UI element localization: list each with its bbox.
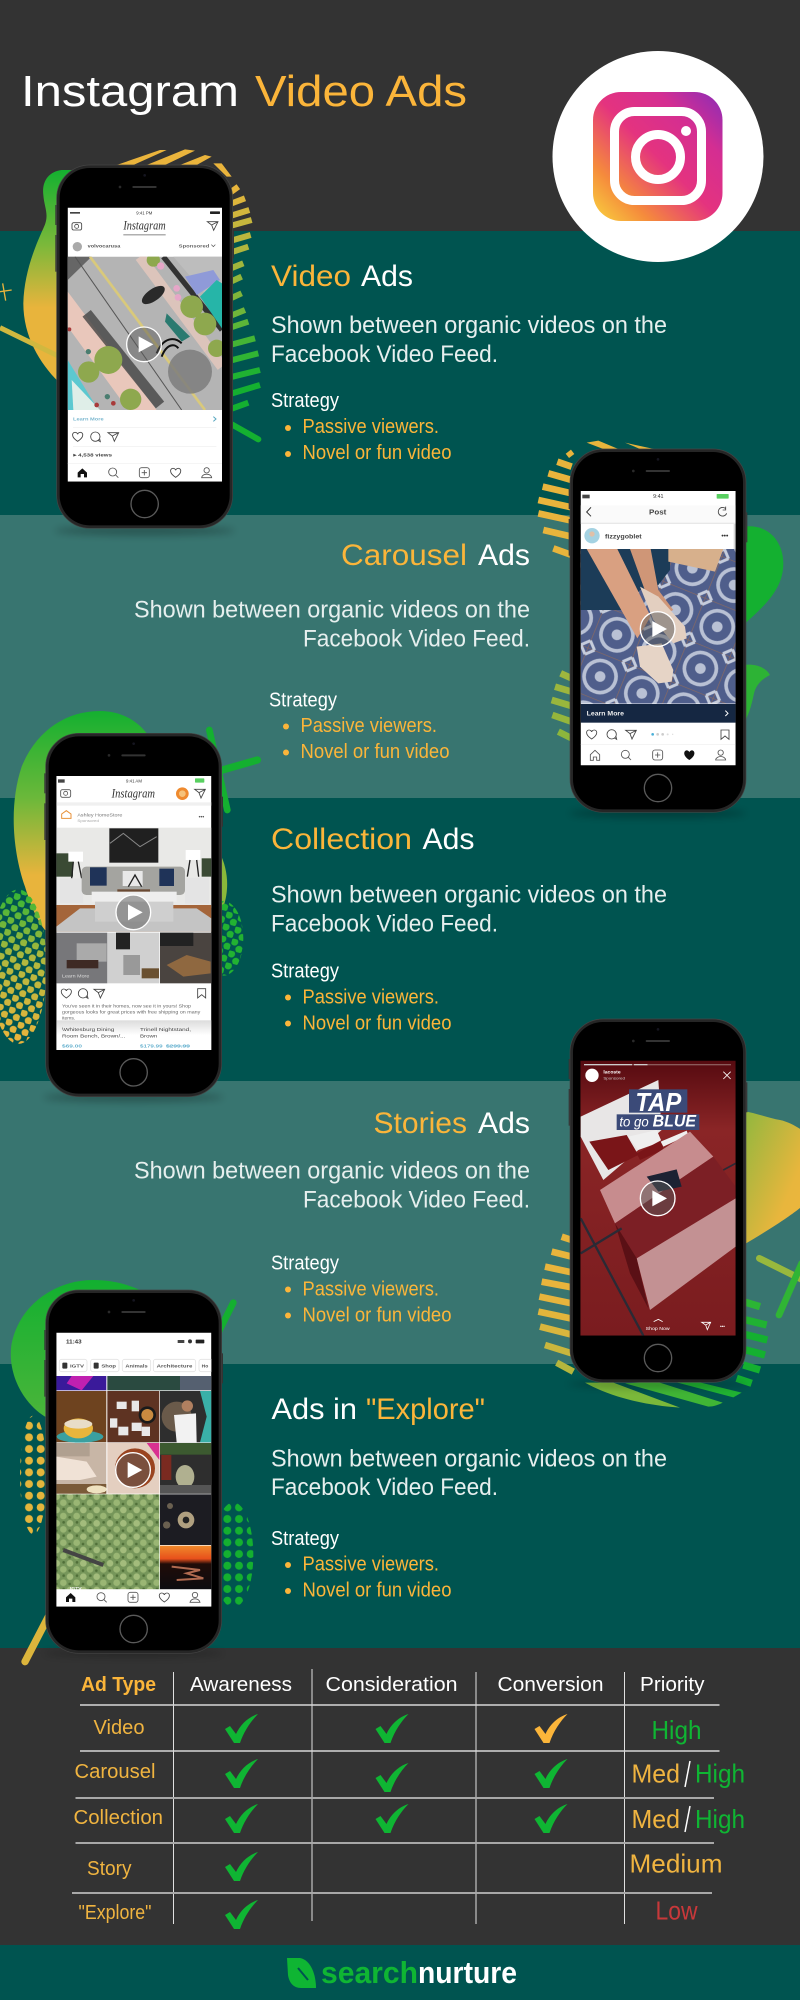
phone screen: collection post: Instagram xyxy=(111,786,155,800)
phone: explore ad with decoration xyxy=(11,1280,253,1662)
phone screen: instagram feed video: Instagram xyxy=(123,218,166,232)
table header row xyxy=(81,1674,704,1696)
panel: stories ads text: Ads xyxy=(478,1107,530,1140)
priority column: Med xyxy=(632,1758,680,1788)
panel: video ads text: Shown between organic videos on the xyxy=(271,312,667,339)
phone: carousel ad with decoration xyxy=(538,441,783,818)
phone screen: explore grid: 11:43 xyxy=(66,1339,82,1345)
footer logo: searchnurture: search xyxy=(321,1955,418,1990)
footer logo: searchnurture xyxy=(287,1955,517,1990)
title: Instagram xyxy=(21,67,239,116)
phone screen: collection post: ••• xyxy=(199,815,204,821)
title xyxy=(21,67,467,116)
phone screen: collection post: 9:41 AM xyxy=(126,778,142,783)
phone screen: collection post: Learn More xyxy=(62,973,90,978)
title: Video Ads xyxy=(255,67,467,116)
panel: stories ads text: Novel or fun video xyxy=(302,1304,452,1326)
phone screen: carousel post: Post xyxy=(649,507,667,516)
phone screen: collection post: You've seen it in their homes, now see it in yours! Shop xyxy=(62,1003,192,1008)
ad type row labels: Carousel xyxy=(74,1761,156,1783)
panel: carousel ads text: Carousel xyxy=(341,539,467,572)
panel: explore ads text: Strategy xyxy=(271,1528,339,1550)
phone screen: story ad: to go xyxy=(619,1114,649,1130)
panel: explore ads text: "Explore" xyxy=(366,1393,485,1426)
phone screen: instagram feed video: ▸ 4,538 views xyxy=(72,453,112,459)
priority column: High xyxy=(695,1804,745,1834)
panel: stories ads text: Facebook Video Feed. xyxy=(303,1186,530,1214)
phone screen: collection post: $299.99 xyxy=(166,1043,190,1049)
phone screen: carousel post: fizzygoblet xyxy=(605,533,643,540)
panel: explore ads text: Shown between organic videos on the xyxy=(271,1446,667,1472)
phone screen: collection post: \Whitesburg Dining xyxy=(62,1027,115,1033)
priority column: Medium xyxy=(630,1848,722,1878)
icon: instagram logo xyxy=(552,51,764,262)
comparison table xyxy=(72,1669,745,1929)
phone screen: carousel post: 9:41 xyxy=(653,494,664,500)
phone screen: explore grid: IGTV xyxy=(70,1586,82,1592)
phone screen: story ad: Shop Now xyxy=(646,1326,670,1331)
panel: stories ads text xyxy=(134,1107,530,1326)
table header row: Consideration xyxy=(326,1674,458,1696)
phone screen: collection post: $69.00 xyxy=(62,1043,82,1049)
table header row: Ad Type xyxy=(81,1674,156,1696)
panel: video ads text xyxy=(271,260,667,464)
panel: explore ads text: Passive viewers. xyxy=(302,1554,439,1576)
panel: explore ads text xyxy=(271,1393,667,1602)
phone screen: instagram feed video: Sponsored xyxy=(179,243,209,249)
panel: explore ads text: Ads in xyxy=(272,1393,357,1426)
phone screen: collection post: Room Bench, Brown/... xyxy=(62,1034,125,1040)
ad type row labels: Collection xyxy=(74,1807,163,1829)
phone screen: collection post xyxy=(56,776,211,1050)
phone screen: story ad: ••• xyxy=(720,1324,725,1329)
panel: stories ads text: Shown between organic videos on the xyxy=(134,1158,530,1184)
table header row: Awareness xyxy=(190,1674,292,1696)
phone screen: explore grid: Ho xyxy=(202,1364,208,1370)
table header row: Conversion xyxy=(498,1674,604,1696)
ad type row labels: "Explore" xyxy=(78,1902,152,1924)
phone screen: carousel post: Learn More xyxy=(587,712,625,718)
ad type row labels xyxy=(74,1717,163,1924)
phone screen: collection post: Sponsored xyxy=(77,819,99,823)
panel: carousel ads text: Facebook Video Feed. xyxy=(303,626,530,652)
priority column: High xyxy=(652,1715,702,1745)
phone screen: story ad: Sponsored xyxy=(603,1076,625,1080)
phone screen: explore grid: Animals xyxy=(125,1364,148,1370)
check marks xyxy=(225,1714,568,1929)
phone: stories ad with decoration xyxy=(538,1019,800,1408)
panel: collection ads text xyxy=(271,823,667,1034)
panel: video ads text: Ads xyxy=(361,260,413,293)
phone screen: collection post: Trinell Nightstand, xyxy=(140,1027,191,1033)
phone screen: collection post: gorgeous looks for great prices with free shipping on many xyxy=(62,1009,201,1014)
panel: video ads text: Video xyxy=(271,260,351,293)
phone screen: story ad: lacoste xyxy=(603,1069,621,1074)
phone screen: collection post: Brown xyxy=(140,1034,158,1040)
panel: carousel ads text: Passive viewers. xyxy=(300,715,437,737)
phone screen: collection post: Ashley HomeStore xyxy=(77,812,123,817)
phone: video ad with decoration xyxy=(0,149,260,535)
panel: video ads text: Facebook Video Feed. xyxy=(271,341,498,368)
panel: carousel ads text xyxy=(134,539,530,763)
panel: video ads text: Strategy xyxy=(271,390,339,412)
phone screen: instagram feed video: volvocarusa xyxy=(88,244,121,250)
panel: video ads text: Passive viewers. xyxy=(302,416,439,438)
panel: carousel ads text: Ads xyxy=(478,539,530,572)
panel: stories ads text: Stories xyxy=(374,1107,467,1140)
priority column xyxy=(630,1715,745,1926)
phone screen: explore grid: Shop xyxy=(101,1364,116,1370)
phone screen: explore grid: Architecture xyxy=(157,1364,193,1370)
phone: collection ad with decoration xyxy=(0,711,257,1102)
phone screen: carousel post: ••• xyxy=(721,533,729,540)
panel: explore ads text: Facebook Video Feed. xyxy=(271,1474,498,1501)
priority column: High xyxy=(695,1758,745,1788)
panel: explore ads text: Novel or fun video xyxy=(302,1580,452,1602)
panel: carousel ads text: Novel or fun video xyxy=(300,741,450,763)
phone screen: carousel post xyxy=(581,491,736,765)
panel: collection ads text: Ads xyxy=(422,823,474,856)
panel: collection ads text: Strategy xyxy=(271,960,339,982)
phone screen: instagram feed video: 9:41 PM xyxy=(136,210,153,215)
phone screen: explore grid: IGTV xyxy=(70,1364,85,1370)
ad type row labels: Video xyxy=(94,1717,144,1739)
phone screen: story ad: TAP xyxy=(635,1087,682,1117)
ad type row labels: Story xyxy=(87,1858,132,1880)
priority column: Low xyxy=(656,1896,698,1926)
phone screen: instagram feed video xyxy=(67,208,225,482)
phone screen: instagram feed video: Learn More xyxy=(73,417,104,423)
phone screen: story ad xyxy=(580,1061,736,1336)
panel: stories ads text: Strategy xyxy=(271,1252,339,1274)
panel: collection ads text: Shown between organic videos on the xyxy=(271,882,667,908)
panel: collection ads text: Collection xyxy=(271,823,412,856)
table header row: Priority xyxy=(640,1674,704,1696)
priority column: Med xyxy=(632,1804,680,1834)
phone screen: explore grid xyxy=(56,1333,219,1607)
panel: video ads text: Novel or fun video xyxy=(302,442,452,464)
panel: carousel ads text: Shown between organic videos on the xyxy=(134,596,530,624)
panel: collection ads text: Facebook Video Feed. xyxy=(271,910,498,938)
footer logo: searchnurture: nurture xyxy=(418,1955,517,1990)
panel: stories ads text: Passive viewers. xyxy=(302,1278,439,1300)
panel: collection ads text: Novel or fun video xyxy=(302,1012,452,1034)
phone screen: collection post: items. xyxy=(62,1015,75,1020)
panel: carousel ads text: Strategy xyxy=(269,690,337,712)
phone screen: collection post: $179.99 xyxy=(140,1043,163,1049)
phone screen: story ad: BLUE xyxy=(653,1112,697,1131)
panel: collection ads text: Passive viewers. xyxy=(302,986,439,1008)
